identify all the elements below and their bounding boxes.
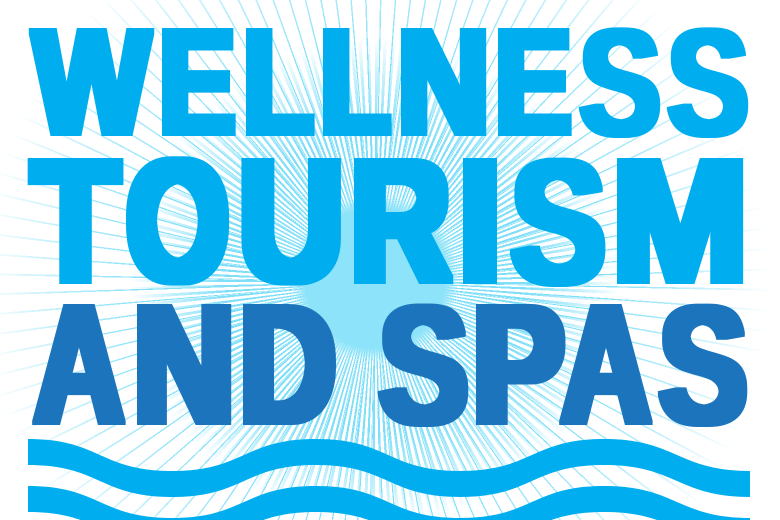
- heading line: WELLNESS: L: [320, 0, 390, 165]
- heading line: AND SPAS: A: [34, 269, 124, 459]
- heading line: TOURISM: M: [612, 125, 748, 317]
- heading line: WELLNESS: N: [397, 0, 490, 165]
- heading line: AND SPAS: P: [473, 272, 564, 458]
- heading line: TOURISM: [32, 124, 748, 322]
- heading line: TOURISM: I: [459, 126, 501, 317]
- heading line: TOURISM: U: [239, 125, 344, 317]
- heading line: WELLNESS: E: [159, 0, 235, 164]
- icon: lower water wave: [28, 486, 750, 520]
- heading line: TOURISM: S: [511, 124, 606, 322]
- icon: upper water wave: [28, 439, 750, 497]
- heading line: TOURISM: O: [127, 126, 229, 317]
- heading line: AND SPAS: [34, 269, 747, 460]
- heading line: AND SPAS: S: [379, 272, 469, 460]
- heading line: WELLNESS: W: [34, 0, 150, 165]
- heading line: AND SPAS: S: [659, 272, 747, 460]
- heading line: WELLNESS: L: [243, 0, 313, 165]
- heading line: WELLNESS: [34, 0, 749, 169]
- heading line: AND SPAS: D: [240, 271, 336, 458]
- heading line: AND SPAS: N: [134, 271, 235, 458]
- heading line: WELLNESS: S: [667, 0, 749, 169]
- heading line: WELLNESS: S: [579, 0, 661, 169]
- heading line: TOURISM: R: [351, 125, 450, 316]
- heading line: WELLNESS: E: [495, 0, 571, 164]
- heading line: TOURISM: T: [32, 125, 119, 317]
- heading line: AND SPAS: A: [561, 269, 651, 459]
